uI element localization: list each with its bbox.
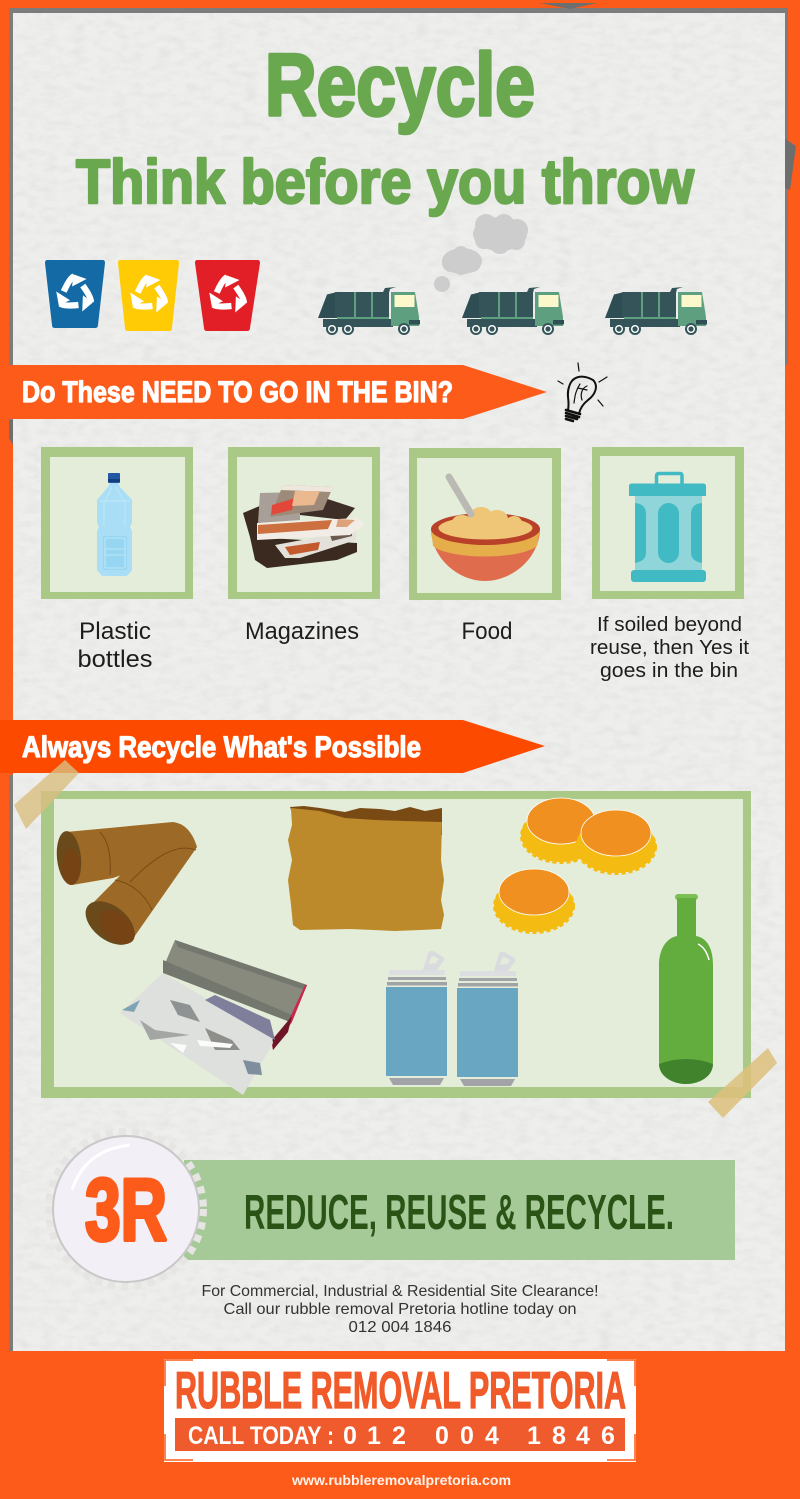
logo: rubble removal pretoria	[164, 1359, 636, 1462]
icon: light bulb	[558, 363, 607, 421]
logo: rubble removal pretoria: CALL TODAY :	[188, 1422, 334, 1450]
icon: green bottle	[659, 894, 713, 1084]
icon: smoke clouds	[434, 214, 528, 292]
website url: www.rubbleremovalpretoria.com	[291, 1472, 511, 1488]
label: soiled beyond reuse	[590, 614, 749, 682]
recycling bins	[45, 260, 260, 331]
panel: 3R banner	[184, 1160, 735, 1260]
icon: trash can	[629, 474, 706, 582]
subtitle: Think before you throw	[76, 148, 695, 217]
label: soiled beyond reuse: If soiled beyond	[597, 614, 742, 636]
label: magazines: Magazines	[245, 618, 359, 645]
label: plastic bottles	[78, 618, 152, 673]
icon: drink cans	[386, 951, 518, 1086]
label: soiled beyond reuse: reuse, then Yes it	[590, 637, 749, 659]
label: soiled beyond reuse: goes in the bin	[600, 660, 738, 682]
banner: always recycle	[0, 720, 545, 773]
garbage trucks	[318, 287, 707, 335]
title: Recycle	[265, 35, 535, 134]
tape: right	[708, 1048, 777, 1118]
icon: truck 2	[462, 287, 564, 335]
badge: 3R bottle cap: 3R	[85, 1160, 167, 1259]
contact text: Call our rubble removal Pretoria hotline today on	[224, 1301, 576, 1318]
banner: need to go in the bin	[0, 365, 547, 419]
panel: magazines	[228, 447, 380, 599]
label: food: Food	[462, 618, 512, 645]
icon: yellow bin	[118, 260, 179, 331]
icon: torn cardboard	[288, 806, 444, 931]
tape: left	[14, 760, 79, 829]
icon: red bin	[195, 260, 260, 331]
logo: rubble removal pretoria: 0120041846	[343, 1422, 615, 1450]
panel: plastic bottles	[41, 447, 193, 599]
icon: truck 1	[318, 287, 420, 335]
banner: always recycle: Always Recycle What's Possible	[22, 731, 421, 764]
icon: food bowl	[431, 477, 540, 581]
panel: bin	[592, 447, 744, 599]
panel: recyclable items	[41, 791, 751, 1098]
icon: plastic bottle	[97, 473, 132, 576]
icon: foil roll	[120, 940, 307, 1095]
banner: need to go in the bin: Do These NEED TO GO IN THE BIN?	[22, 376, 453, 409]
contact text	[202, 1283, 598, 1336]
label: plastic bottles: Plastic	[79, 618, 151, 645]
contact text: For Commercial, Industrial & Residential Site Clearance!	[202, 1283, 598, 1300]
icon: truck 3	[605, 287, 707, 335]
label: plastic bottles: bottles	[78, 646, 152, 673]
contact text: 012 004 1846	[348, 1319, 452, 1336]
icon: bottle caps	[494, 798, 656, 932]
icon: blue bin	[45, 260, 105, 328]
panel: food	[409, 448, 561, 600]
icon: cardboard tubes	[54, 822, 197, 954]
icon: magazine pile	[243, 485, 365, 568]
badge: 3R bottle cap	[50, 1133, 202, 1285]
